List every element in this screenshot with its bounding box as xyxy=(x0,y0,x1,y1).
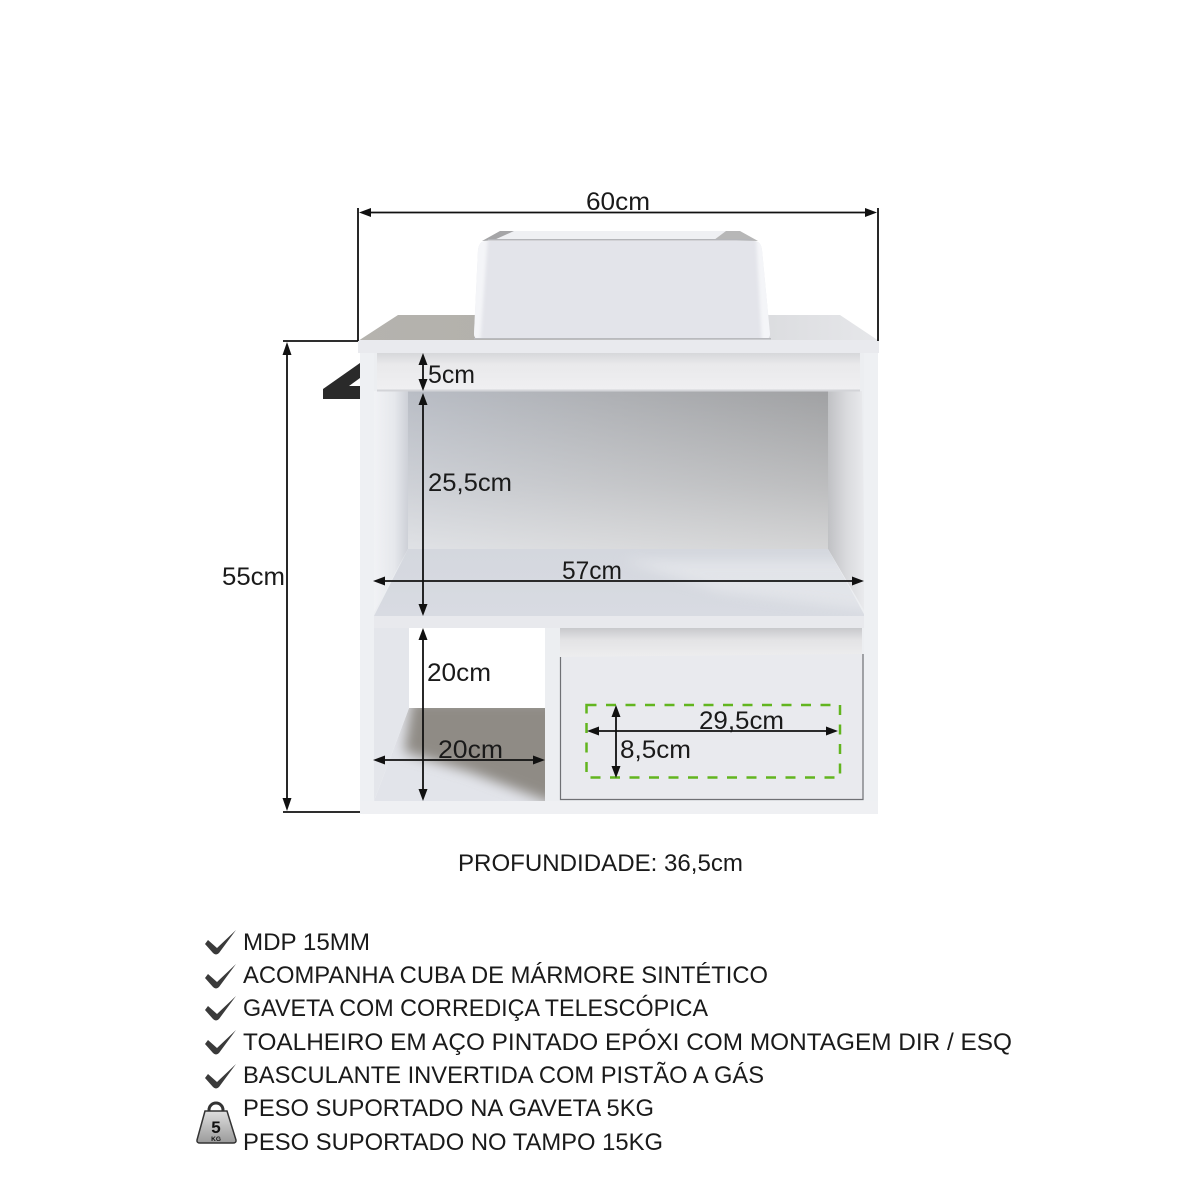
dimension 55cm height xyxy=(222,341,360,812)
countertop front edge xyxy=(358,340,879,353)
dimension 57cm xyxy=(373,557,864,586)
icon: 5kg weight xyxy=(197,1103,236,1143)
back panel of upper niche xyxy=(408,391,828,549)
depth label: PROFUNDIDADE: 36,5cm xyxy=(458,850,743,877)
drawer recess xyxy=(560,628,862,658)
middle shelf top xyxy=(374,549,865,616)
feature list xyxy=(197,929,1012,1156)
shelf highlight xyxy=(654,562,860,606)
icon: 5kg weight: KG xyxy=(211,1136,221,1143)
countertop surface xyxy=(358,315,879,341)
dimension 8,5cm xyxy=(612,705,691,778)
left inner side of upper niche xyxy=(374,391,408,612)
bottom plinth xyxy=(360,801,878,814)
feature: basculante: BASCULANTE INVERTIDA COM PISTÃO A GÁS xyxy=(243,1062,764,1089)
feature: toalheiro: TOALHEIRO EM AÇO PINTADO EPÓXI COM MONTAGEM DIR / ESQ xyxy=(243,1029,1012,1056)
open lower niche xyxy=(374,628,545,801)
lower divider xyxy=(545,628,560,801)
middle shelf front edge xyxy=(374,616,865,628)
sink xyxy=(470,231,775,345)
dimension 20cm vertical: 20cm xyxy=(427,659,491,687)
dimension 60cm width xyxy=(358,188,878,341)
cabinet illustration xyxy=(358,231,880,814)
check icon: basculante xyxy=(205,1064,236,1088)
left side panel front xyxy=(360,353,374,813)
dimension 60cm width: 60cm xyxy=(586,188,650,216)
dimension 5cm xyxy=(418,353,475,391)
dimension 25,5cm xyxy=(418,393,512,616)
check icon: toalheiro xyxy=(205,1030,236,1054)
feature: cuba: ACOMPANHA CUBA DE MÁRMORE SINTÉTICO xyxy=(243,962,768,989)
drawer front xyxy=(560,654,863,800)
towel rail xyxy=(323,363,360,399)
check icon: gaveta xyxy=(205,996,236,1020)
dimension 20cm vertical xyxy=(418,628,491,801)
feature: peso tampo: PESO SUPORTADO NO TAMPO 15KG xyxy=(243,1129,663,1156)
dimension 57cm: 57cm xyxy=(562,557,622,585)
dimension 25,5cm: 25,5cm xyxy=(428,469,512,497)
dimension 20cm horizontal xyxy=(373,736,545,764)
right inner side of upper niche xyxy=(828,391,865,612)
dimension 5cm: 5cm xyxy=(428,361,475,389)
feature: peso gaveta: PESO SUPORTADO NA GAVETA 5KG xyxy=(243,1095,654,1122)
cabinet body panel xyxy=(360,353,878,813)
dimension 29,5cm xyxy=(587,707,838,736)
dimension 29,5cm: 29,5cm xyxy=(699,707,784,735)
drawer internal dimension box xyxy=(586,705,840,778)
apron rail xyxy=(377,353,860,392)
right side panel front xyxy=(864,353,878,813)
dimension 8,5cm: 8,5cm xyxy=(620,736,691,764)
check icon: MDP xyxy=(205,930,236,954)
dimension 20cm horizontal: 20cm xyxy=(438,736,503,764)
icon: 5kg weight: 5 xyxy=(211,1118,221,1137)
feature: MDP 15MM: MDP 15MM xyxy=(243,929,370,956)
check icon: cuba xyxy=(205,964,236,988)
dimension 55cm height: 55cm xyxy=(222,563,285,591)
feature: gaveta: GAVETA COM CORREDIÇA TELESCÓPICA xyxy=(243,995,708,1022)
